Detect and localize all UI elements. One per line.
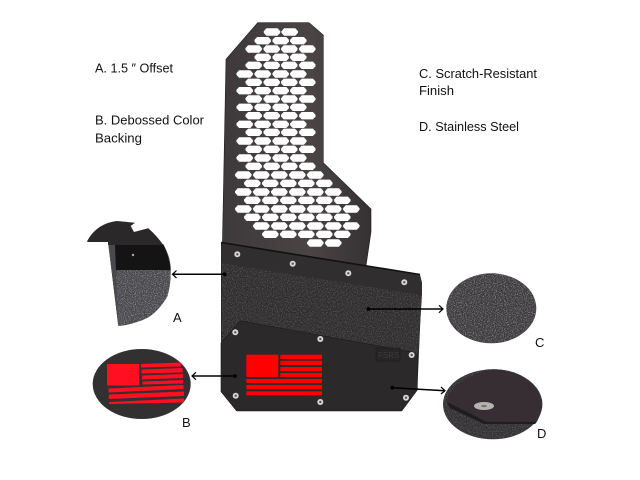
screws <box>232 251 415 405</box>
logo badge <box>376 348 400 361</box>
text block: A and B features <box>95 60 205 146</box>
arrow B <box>192 372 236 380</box>
detail C: finish texture <box>446 273 536 343</box>
red flag <box>246 355 322 395</box>
arrow A <box>172 270 226 278</box>
top edge line <box>221 242 420 274</box>
label B: B <box>182 415 191 430</box>
text block: C and D features: C. Scratch-Resistant <box>419 66 537 81</box>
label C: C <box>535 335 544 350</box>
arrow C <box>367 305 443 313</box>
arrow D <box>391 386 445 394</box>
label D: D <box>537 426 546 441</box>
text block: A and B features: B. Debossed Color <box>95 112 205 128</box>
label A: A <box>173 310 182 325</box>
top band <box>221 243 422 295</box>
lower mud flap panel <box>221 242 422 411</box>
logo badge: FSRS <box>378 351 399 360</box>
detail D: stainless screw close-up <box>443 369 542 439</box>
text block: C and D features: Finish <box>419 83 454 98</box>
upper perforated plate <box>222 23 371 266</box>
text block: C and D features <box>419 66 537 134</box>
red flag close-up <box>107 362 184 404</box>
lower plate <box>221 321 417 411</box>
text block: A and B features: A. 1.5 ″ Offset <box>95 60 173 76</box>
textured scratch-resistant finish <box>222 263 422 355</box>
text block: C and D features: D. Stainless Steel <box>419 119 519 134</box>
detail B: flag close-up <box>93 349 191 419</box>
text block: A and B features: Backing <box>95 130 142 146</box>
detail A: offset side view <box>87 221 171 326</box>
